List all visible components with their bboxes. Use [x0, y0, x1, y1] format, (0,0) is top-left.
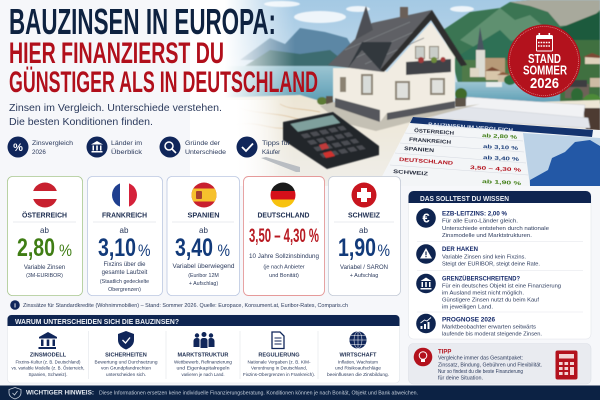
badge: Stand Sommer 2026: SOMMER — [523, 64, 567, 78]
footer: Wichtiger Hinweis: WICHTIGER HINWEIS: — [26, 390, 94, 396]
card: Schweiz: ab — [359, 226, 368, 235]
panel: Tipp: Vergleiche immer das Gesamtpaket: — [438, 356, 523, 362]
item: Der Haken: Variable Zinsen sind kein Fixzins. — [442, 254, 526, 260]
subtitle: Zinsen im Vergleich. Unterschiede verstehen. — [9, 103, 222, 114]
sheet rows: SCHWEIZ — [393, 169, 429, 178]
comparison sheet: BAUZINSEN IM VERGLEICH — [428, 122, 513, 134]
feature: Zinsvergleich 2026: 2026 — [32, 149, 46, 156]
panel: Das solltest du wissen: DAS SOLLTEST DU WISSEN — [420, 196, 509, 203]
column: Zinsmodell: ZINSMODELL — [30, 352, 67, 358]
pen — [261, 157, 300, 172]
panel: Tipp: Zinssatz, Bindung, Gebühren und Flexibilität. — [438, 362, 542, 368]
item: Prognose 2026: Marktbeobachter erwarten seitwärts — [442, 324, 536, 330]
column: Zinsmodell: Fixzins-Kultur (z. B. Deutschland) — [16, 360, 81, 364]
item: Grenzüberschreitend?: im jeweiligen Land. — [442, 304, 493, 310]
sheet rows: FRANKREICH — [409, 137, 451, 146]
icon: calculator — [556, 350, 578, 380]
card: Deutschland: (je nach Anbieter — [263, 264, 305, 270]
card: Österreich: Variable Zinsen — [24, 265, 65, 271]
sheet rows: 3,50 – 4,30 % — [470, 165, 522, 174]
card: Österreich: 2,80 — [17, 234, 55, 262]
comparison sheet — [377, 117, 600, 187]
card: Deutschland: DEUTSCHLAND — [258, 210, 310, 220]
feature: Zinsvergleich 2026: Zinsvergleich — [32, 140, 74, 147]
card: Schweiz: + Aufschlag — [350, 273, 378, 279]
title: GÜNSTIGER ALS IN DEUTSCHLAND — [9, 66, 318, 99]
flag: Germany — [270, 182, 296, 208]
card: Spanien: SPANIEN — [188, 210, 220, 220]
column: Zinsmodell: Spanien, Schweiz). — [28, 372, 68, 377]
item: EZB-Leitzins: Unterschiede entstehen durch nationale — [442, 226, 549, 232]
item: Prognose 2026: laufende bis moderat steigende Zinsen. — [442, 332, 542, 338]
panel: Tipp: Nur so findest du die beste Finanzierung — [438, 369, 523, 375]
card: Spanien: (Euribor 12M — [188, 273, 219, 279]
card: Schweiz: % — [378, 241, 390, 260]
card: Frankreich: Obergrenzen) — [108, 287, 141, 293]
panel: Tipp — [408, 344, 591, 384]
item: EZB-Leitzins: EZB-LEITZINS: 2,00 % — [442, 212, 508, 218]
item: EZB-Leitzins: Zinsmodelle und Marktstrukturen. — [442, 233, 532, 239]
icon: light bulb — [414, 348, 432, 366]
column: Marktstruktur: und Eigenkapitalregeln — [176, 366, 230, 370]
flag: France — [112, 183, 137, 207]
item: Der Haken: DER HAKEN — [442, 247, 478, 253]
sheet rows: ab 2,80 % — [482, 133, 518, 141]
sheet header — [410, 117, 593, 137]
card: Österreich: ab — [40, 226, 49, 235]
card: Österreich: % — [59, 241, 72, 260]
sheet rows: ÖSTERREICH — [414, 127, 455, 137]
card: Schweiz: Variabel / SARON — [340, 265, 388, 271]
column: Marktstruktur: MARKTSTRUKTUR — [178, 352, 228, 358]
column: Sicherheiten: Bewertung und Durchsetzung — [94, 360, 158, 364]
source note: i — [14, 302, 16, 310]
feature: Zinsvergleich 2026: % — [13, 142, 23, 154]
card: Schweiz: 1,90 — [338, 234, 376, 262]
column: Marktstruktur: variieren je nach Land. — [182, 372, 224, 377]
badge: Stand Sommer 2026: 2026 — [530, 75, 559, 92]
item: Prognose 2026 — [416, 314, 542, 338]
card: Österreich: ÖSTERREICH — [22, 210, 67, 220]
item: Der Haken: Steigt der EURIBOR, steigt deine Rate. — [442, 262, 540, 268]
column: Wirtschaft: beeinflussen die Zinsbildung. — [327, 372, 389, 377]
card: Frankreich — [88, 176, 162, 296]
column: Regulierung — [243, 332, 315, 377]
sheet rows: DEUTSCHLAND — [399, 157, 453, 167]
column: Wirtschaft: und Risikoaufschläge — [335, 366, 381, 370]
feature: Länder im Überblick: Überblick — [111, 149, 143, 156]
sheet rows — [393, 127, 522, 187]
card: Frankreich: FRANKREICH — [102, 210, 147, 220]
sheet rows: ab 3,10 % — [483, 144, 519, 152]
feature: Tipps für Käufer: Tipps für — [262, 140, 290, 147]
sheet rows: SPANIEN — [404, 146, 435, 154]
item: Der Haken — [416, 244, 540, 268]
card: Frankreich: (Staatlich gedeckelte — [100, 279, 149, 285]
left fade of hero — [190, 0, 225, 100]
card: Deutschland — [244, 176, 324, 296]
icon: calendar — [536, 33, 553, 52]
house — [320, 6, 480, 131]
column: Zinsmodell: vs. variable Modelle (z. B. Österreich, — [12, 364, 84, 370]
card: Schweiz: SCHWEIZ — [348, 210, 380, 220]
calculator — [283, 112, 379, 169]
column: Zinsmodell — [12, 332, 84, 377]
feature: Zinsvergleich 2026 — [8, 136, 74, 158]
column: Regulierung: Nationale Vorgaben (z. B. KIM- — [248, 360, 311, 364]
card: Deutschland: 3,50 – 4,30 % — [249, 226, 319, 247]
card: Spanien: ab — [199, 226, 208, 235]
icon: shield — [9, 388, 21, 399]
item: Grenzüberschreitend?: Für ein deutsches Objekt ist eine Finanzierung — [442, 284, 561, 290]
badge: Stand Sommer 2026: STAND — [528, 52, 561, 66]
item: EZB-Leitzins: € — [422, 210, 430, 226]
card: Spanien: + Aufschlag) — [189, 281, 218, 287]
panel: Tipp: für deine Situation. — [438, 376, 483, 382]
feature: Tipps für Käufer: Käufer — [262, 149, 280, 156]
footer: Wichtiger Hinweis — [0, 386, 600, 400]
title: BAUZINSEN IN EUROPA: — [9, 1, 276, 42]
card: Österreich — [8, 176, 82, 296]
feature: Gründe der Unterschiede — [160, 136, 227, 158]
card: Frankreich: 3,10 — [98, 234, 136, 262]
card: Deutschland: 10 Jahre Sollzinsbindung — [249, 254, 319, 260]
column: Regulierung: Verordnung in Deutschland, — [251, 366, 307, 370]
column: Sicherheiten: SICHERHEITEN — [105, 352, 147, 358]
hero image: house on table with alpine lake — [190, 0, 600, 186]
feature: Gründe der Unterschiede: Unterschiede — [185, 149, 227, 156]
item: Grenzüberschreitend?: GRENZÜBERSCHREITEND? — [442, 276, 520, 282]
card: Frankreich: Fixzins über die — [103, 262, 146, 268]
card: Spanien: Variabel überwiegend — [172, 264, 234, 270]
card: Schweiz — [328, 176, 400, 296]
flag: Switzerland — [352, 182, 376, 208]
item: Grenzüberschreitend?: Günstigere Zinsen nutzt du beim Kauf — [442, 298, 540, 304]
item: Prognose 2026: PROGNOSE 2026 — [442, 318, 496, 324]
panel: Tipp: TIPP — [438, 350, 451, 356]
sheet rows: ab 1,90 % — [482, 179, 522, 187]
card: Spanien — [167, 176, 240, 296]
sheet rows: ab 3,40 % — [483, 155, 520, 163]
column: Regulierung: REGULIERUNG — [258, 352, 300, 358]
flag: Spain — [191, 182, 217, 208]
title: HIER FINANZIERST DU — [9, 37, 224, 70]
column: Marktstruktur — [174, 332, 232, 377]
panel: Warum unterscheiden sich die Bauzinsen? — [8, 315, 400, 383]
column: Marktstruktur: Wettbewerb, Refinanzierung — [174, 360, 232, 364]
feature: Länder im Überblick — [86, 136, 143, 158]
footer: Wichtiger Hinweis: Diese Informationen ersetzen keine individuelle Finanzierungsberatung. Konditionen können je nach Bonität, Objekt und Bank abweichen. — [99, 390, 418, 396]
source note: Zinssätze für Standardkredite (Wohnimmobilien) – Stand: Sommer 2026. Quelle: Europace, Konsument.at, Euribor-Rates, Comparis.ch — [23, 303, 348, 309]
card: Spanien: 3,40 — [175, 234, 213, 262]
card: Frankreich: ab — [120, 226, 129, 235]
panel: Das solltest du wissen — [408, 191, 591, 339]
card: Spanien: % — [218, 241, 230, 260]
title — [9, 1, 318, 99]
column: Wirtschaft — [327, 331, 389, 377]
item: Grenzüberschreitend? — [416, 274, 561, 310]
column: Regulierung: Fixzins-Obergrenzen in Frankreich). — [243, 372, 315, 377]
flag: Austria — [33, 182, 57, 208]
source note — [10, 300, 348, 310]
item: EZB-Leitzins — [416, 208, 549, 239]
feature: Tipps für Käufer — [236, 136, 290, 158]
column: Wirtschaft: WIRTSCHAFT — [340, 352, 377, 358]
item: EZB-Leitzins: Für alle Euro-Länder gleich. — [442, 218, 518, 224]
card: Frankreich: gesamte Laufzeit — [102, 270, 148, 276]
badge: Stand Sommer 2026 — [508, 24, 580, 98]
panel: Warum unterscheiden sich die Bauzinsen?: WARUM UNTERSCHEIDEN SICH DIE BAUZINSEN? — [15, 319, 179, 326]
card: Österreich: (3M-EURIBOR) — [26, 273, 63, 279]
card: Deutschland: und Bonität) — [269, 273, 299, 279]
feature: Länder im Überblick: Länder im — [111, 140, 142, 147]
column: Sicherheiten: unterscheiden sich. — [106, 372, 146, 377]
column: Wirtschaft: Inflation, Wachstum — [338, 360, 378, 364]
card: Frankreich: % — [138, 241, 150, 260]
subtitle: Die besten Konditionen finden. — [9, 117, 153, 128]
column: Sicherheiten — [94, 331, 158, 377]
sheet map — [523, 133, 600, 186]
subtitle — [9, 103, 222, 128]
item: Grenzüberschreitend?: im Ausland meist nicht möglich. — [442, 290, 524, 296]
feature: Gründe der Unterschiede: Gründe der — [185, 140, 220, 147]
column: Sicherheiten: von Grundpfandrechten — [101, 366, 151, 370]
